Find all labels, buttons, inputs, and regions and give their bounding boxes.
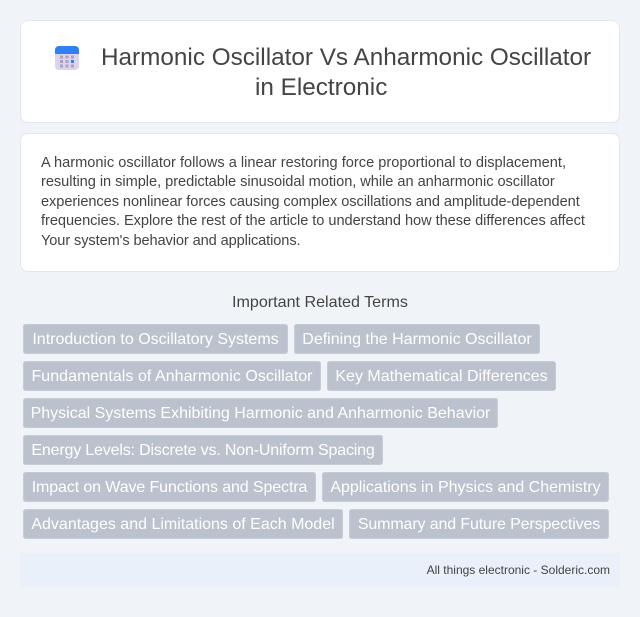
text block: description: experiences nonlinear forces causing complex oscillations and amplitude-dependent bbox=[41, 194, 580, 210]
tag: Advantages and Limitations of Each Model bbox=[31, 516, 335, 533]
tag bbox=[327, 361, 556, 391]
tag: Fundamentals of Anharmonic Oscillator bbox=[31, 368, 313, 385]
tag bbox=[349, 509, 609, 539]
tag bbox=[23, 361, 321, 391]
text block: description: resulting in simple, predictable sinusoidal motion, while an anharmonic oscillator bbox=[41, 174, 555, 190]
tag: Physical Systems Exhibiting Harmonic and Anharmonic Behavior bbox=[31, 405, 490, 422]
panel: description card bbox=[20, 133, 620, 272]
tag: Summary and Future Perspectives bbox=[358, 516, 600, 533]
heading: title bbox=[101, 44, 591, 101]
tag bbox=[322, 472, 609, 502]
tag: Energy Levels: Discrete vs. Non-Uniform Spacing bbox=[31, 442, 375, 459]
tag bbox=[23, 398, 498, 428]
tag bbox=[23, 509, 343, 539]
tag: Key Mathematical Differences bbox=[335, 368, 548, 385]
tag: Impact on Wave Functions and Spectra bbox=[32, 479, 307, 496]
tag: Introduction to Oscillatory Systems bbox=[32, 331, 279, 348]
text block: description: frequencies. Explore the rest of the article to understand how these differences affect bbox=[41, 213, 585, 229]
icon: calendar bbox=[55, 46, 79, 70]
text: footer credit: All things electronic - Solderic.com bbox=[427, 563, 610, 577]
text block: description bbox=[41, 155, 585, 249]
panel: footer bbox=[20, 553, 620, 587]
tag: Defining the Harmonic Oscillator bbox=[302, 331, 532, 348]
tag bbox=[294, 324, 540, 354]
panel: title card bbox=[20, 20, 620, 123]
heading: important related terms: Important Related Terms bbox=[232, 293, 408, 311]
panel: related term tags bbox=[23, 324, 609, 539]
tag: Applications in Physics and Chemistry bbox=[330, 479, 601, 496]
heading: title: Harmonic Oscillator Vs Anharmonic Oscillator bbox=[101, 44, 591, 71]
tag bbox=[23, 324, 288, 354]
text block: description: Your system's behavior and applications. bbox=[41, 233, 300, 249]
heading: title: in Electronic bbox=[255, 74, 387, 101]
text block: description: A harmonic oscillator follows a linear restoring force proportional to displacement, bbox=[41, 155, 566, 171]
tag bbox=[23, 472, 316, 502]
tag bbox=[23, 435, 383, 465]
